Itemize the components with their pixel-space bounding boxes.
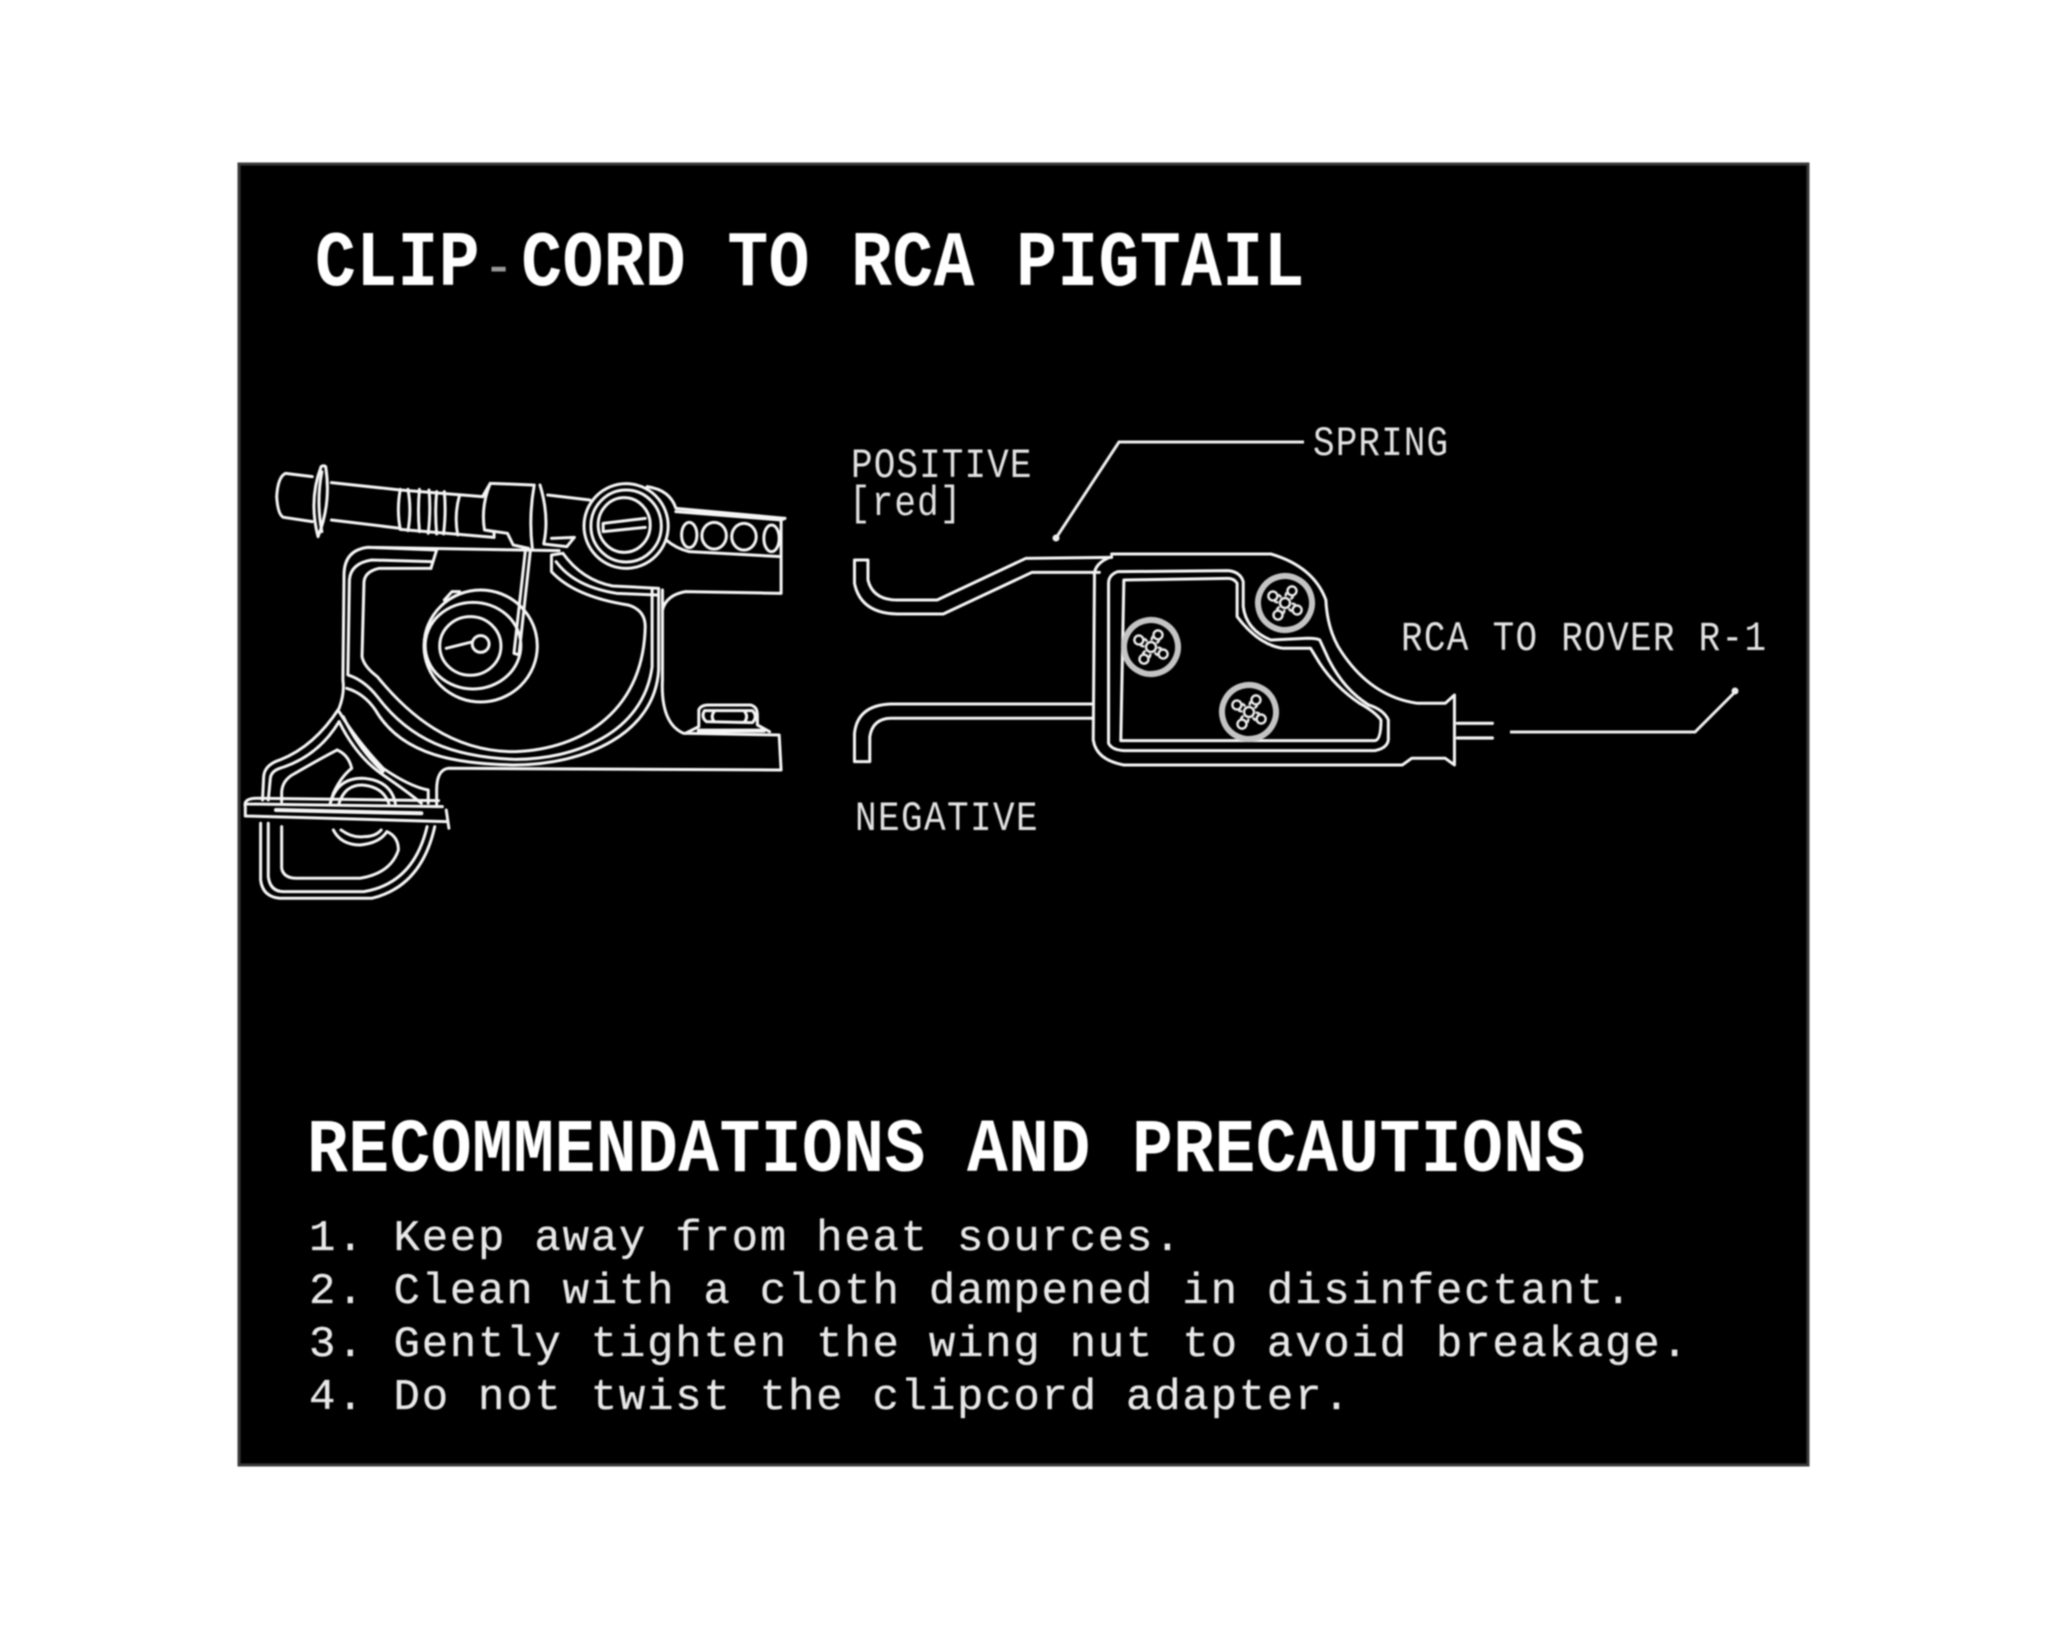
- leader line: RCA to Rover: [1510, 688, 1738, 732]
- illustration: RCA pigtail top view: [854, 554, 1492, 765]
- item 1: 1. Keep away from heat sources.: [309, 1214, 1182, 1264]
- inner contour second line: [1121, 578, 1381, 741]
- item 4: 4. Do not twist the clipcord adapter.: [309, 1373, 1351, 1423]
- adapter body outline: [1093, 554, 1454, 765]
- list: recommendations: [309, 1214, 1690, 1423]
- positive wire: [854, 557, 1112, 614]
- central disc and spring arm: [424, 550, 537, 702]
- frame outline: [263, 547, 781, 807]
- label: negative: NEGATIVE: [855, 796, 1039, 843]
- label: spring: SPRING: [1313, 421, 1449, 468]
- output prongs: [1458, 723, 1492, 738]
- illustration: clip-cord adapter side view: [245, 466, 785, 898]
- label: red: [red]: [849, 481, 962, 528]
- leader line: spring: [1052, 442, 1304, 542]
- label: positive: POSITIVE: [851, 443, 1033, 490]
- item 2: 2. Clean with a cloth dampened in disinfectant.: [309, 1267, 1633, 1317]
- heading: recommendations: RECOMMENDATIONS AND PRECAUTIONS: [307, 1108, 1586, 1194]
- title: CLIP-CORD TO RCA PIGTAIL: [315, 221, 1305, 310]
- rail with holes: [662, 518, 785, 610]
- wing nut: [584, 484, 785, 568]
- item 3: 3. Gently tighten the wing nut to avoid breakage.: [309, 1320, 1690, 1370]
- handle barrel with rings: [277, 466, 590, 548]
- lower clip body: [245, 712, 449, 898]
- screw: left: [1114, 610, 1188, 684]
- inner contour: [1109, 571, 1388, 751]
- negative wire: [854, 704, 1093, 762]
- panel: black background: [239, 164, 1808, 1465]
- mounting nut: [685, 705, 770, 733]
- screw: bottom: [1212, 675, 1286, 749]
- label: RCA to Rover R-1: RCA TO ROVER R-1: [1401, 616, 1767, 663]
- screw: top right: [1248, 566, 1322, 640]
